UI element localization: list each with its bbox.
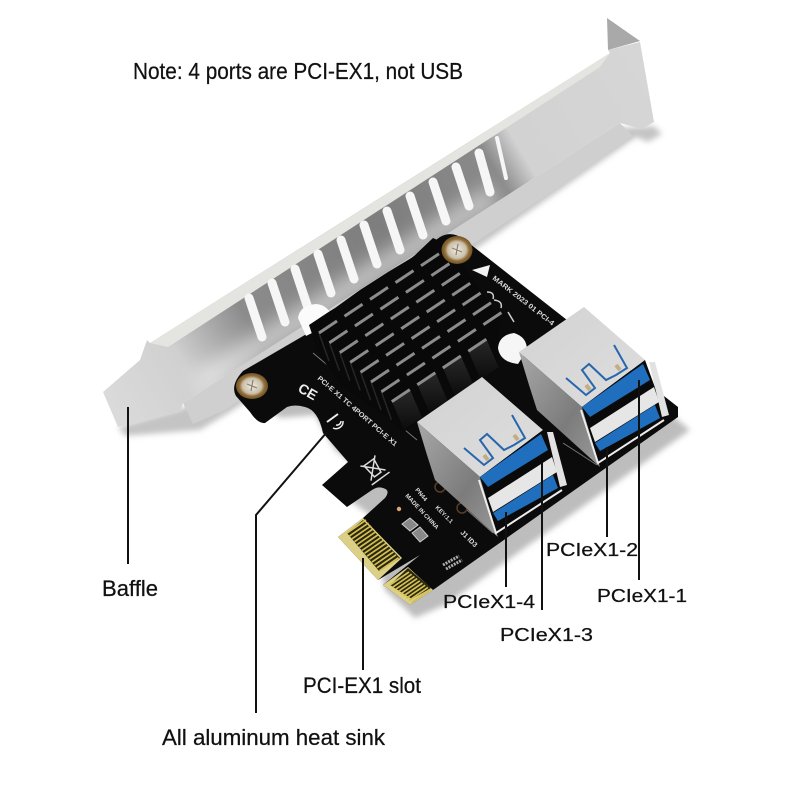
label: pcie x1-2: PCIeX1-2 — [546, 540, 638, 560]
ce mark: CE — [296, 380, 320, 403]
chip components — [397, 482, 467, 569]
title note: Note: 4 ports are PCI-EX1, not USB — [133, 58, 463, 84]
screw: top — [442, 236, 472, 264]
gold finger: main — [338, 518, 402, 580]
label: pcie x1-3: PCIeX1-3 — [500, 625, 593, 645]
white notch: bracket tab — [298, 304, 332, 336]
bracket (baffle) — [103, 18, 662, 436]
board text: made in china: J1 ID3 — [459, 529, 478, 549]
board marks near heat sink — [487, 292, 514, 322]
icon: crossed bin — [359, 454, 390, 485]
label: baffle: Baffle — [102, 576, 158, 601]
label: pcie x1-4: PCIeX1-4 — [443, 592, 535, 612]
board text: model: PCI-E X1 TC 4PORT PCI-E X1 — [316, 375, 398, 448]
board text: made in china: KEY:1.1 — [434, 505, 454, 526]
board text: top marking: MARK 2023 01 PCI-4 — [491, 275, 555, 327]
heat sink — [309, 238, 501, 432]
gold finger: secondary — [383, 567, 433, 605]
fcc style mark — [327, 414, 343, 429]
leader lines — [128, 380, 639, 713]
white notch: board hole — [498, 333, 527, 364]
icon: triangle marker — [472, 265, 490, 277]
screw: left — [236, 373, 268, 399]
usb port 1 and 2 housing — [519, 307, 669, 467]
label: slot: PCI-EX1 slot — [303, 673, 421, 698]
board shadow — [250, 250, 690, 618]
label: heat sink: All aluminum heat sink — [162, 725, 386, 750]
label: pcie x1-1: PCIeX1-1 — [597, 586, 687, 606]
usb port 3 and 4 housing — [417, 377, 567, 537]
circuit board — [234, 234, 678, 605]
board text: made in china: PN44 — [413, 487, 428, 503]
board outline trace — [313, 353, 597, 533]
board text: made in china — [404, 487, 478, 549]
board text: made in china: MADE IN CHINA — [404, 493, 440, 531]
